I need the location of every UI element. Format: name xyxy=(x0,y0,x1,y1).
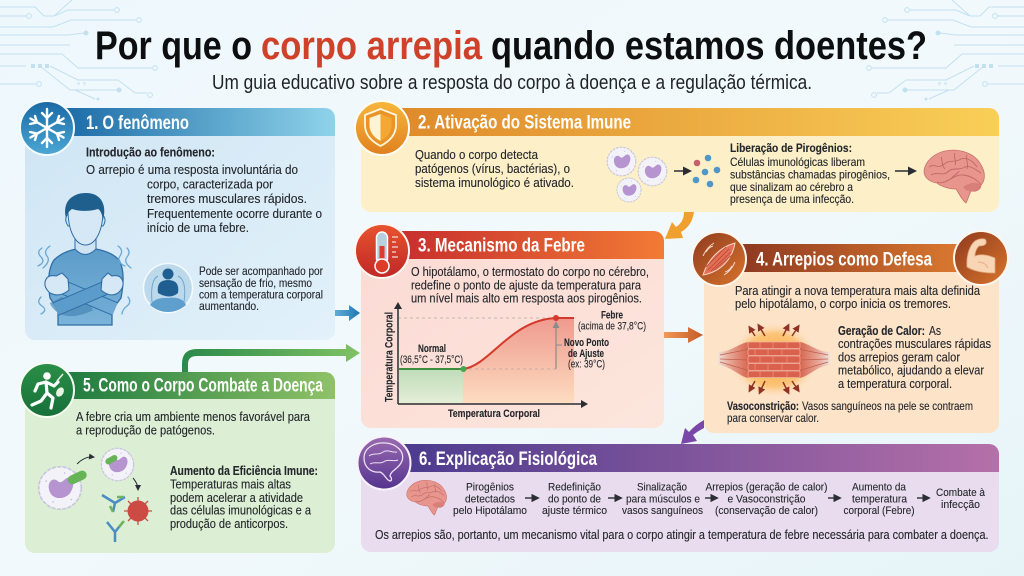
icon: person in bed xyxy=(144,264,192,312)
arrow: step 2 to 3 xyxy=(608,497,620,499)
text: hipotálamo: um nível mais alto em resposta aos pirogênios. xyxy=(411,290,642,306)
step: aumento da temperatura: corporal (Febre) xyxy=(844,505,915,517)
text: sensação de frio: aumentando. xyxy=(199,299,259,313)
text: aumento da eficiência imune: das células imunológicas e a xyxy=(170,502,312,518)
label: novo ponto de ajuste: (ex: 39°C) xyxy=(568,358,605,370)
text: hipotálamo: O hipotálamo, o termostato do corpo no cérebro, xyxy=(411,264,649,279)
header: 2 Ativação xyxy=(395,108,999,136)
panel: 2 Ativação do Sistema Imune xyxy=(355,101,999,212)
text: geração de calor: dos arrepios geram calor xyxy=(838,350,961,364)
subtitle: Um guia educativo sobre a resposta do corpo à doença e a regulação térmica. xyxy=(212,71,812,94)
step: combate à infecção xyxy=(936,487,986,511)
text: liberação de pirogênios: Células imunológicas liberam xyxy=(730,155,865,169)
icon: shield xyxy=(355,101,409,155)
text: introdução: tremores musculares rápidos. xyxy=(147,191,307,206)
text: geração de calor xyxy=(838,323,991,391)
text: aumento da eficiência imune xyxy=(170,463,318,531)
step: redefinição: ajuste térmico xyxy=(542,505,607,517)
text: introdução xyxy=(86,144,322,235)
step: pirogênios detectados: detectados xyxy=(465,494,515,506)
step: aumento da temperatura xyxy=(844,482,915,517)
step: redefinição: do ponto de xyxy=(548,494,601,506)
panel: 1 O fenômeno xyxy=(20,101,335,340)
text: liberação de pirogênios: Liberação de Pirogênios: xyxy=(730,141,852,155)
text: sensação de frio xyxy=(199,264,323,313)
step: aumento da temperatura: temperatura xyxy=(852,494,908,506)
step: sinalização: vasos sanguíneos xyxy=(622,505,703,517)
title: quando estamos doentes? xyxy=(491,24,927,68)
step: redefinição: Redefinição xyxy=(548,482,601,494)
text: vasoconstrição xyxy=(727,399,973,425)
text: geração de calor: a temperatura corporal. xyxy=(838,376,952,391)
text: hipotálamo: redefine o ponto de ajuste da temperatura para xyxy=(411,278,642,292)
label: normal: Normal xyxy=(418,343,446,355)
header: 2 Ativação: 2. Ativação do Sistema Imune xyxy=(418,112,631,134)
text: vasoconstrição: para conservar calor. xyxy=(727,411,819,425)
text: introdução: início de uma febre. xyxy=(147,220,249,235)
text: sensação de frio: sensação de frio, mesmo xyxy=(199,276,312,290)
text: aumento da eficiência imune: Aumento da Eficiência Imune: xyxy=(170,463,318,478)
text: liberação de pirogênios: presença de uma infecção. xyxy=(730,192,854,206)
header: 1 O fenômeno xyxy=(60,108,335,136)
icon: brain xyxy=(924,150,984,203)
icon: immune cells xyxy=(607,147,667,202)
icon: muscle xyxy=(692,232,746,286)
icon: contracting muscle with heat xyxy=(718,322,830,398)
header: 3 Mecanismo xyxy=(395,231,664,259)
text: sensação de frio: com a temperatura corporal xyxy=(199,288,323,302)
text: sensação de frio: Pode ser acompanhado por xyxy=(199,264,323,278)
text: detecta patógenos: sistema imunológico é ativado. xyxy=(415,175,574,190)
label: febre: Febre xyxy=(601,310,623,322)
arrow: orange from panel 2 to panel 3 xyxy=(665,212,694,239)
text: introdução: Introdução ao fenômeno: xyxy=(86,144,215,160)
text: geração de calor: metabólico, ajudando a elevar xyxy=(838,362,985,378)
label: novo ponto de ajuste: de Ajuste xyxy=(568,348,604,360)
axis label: x: Temperatura Corporal xyxy=(448,408,540,420)
panel: 6 Explicação Fisiológica xyxy=(358,436,999,552)
label: novo ponto de ajuste xyxy=(564,337,609,370)
arrow: cells to pyrogens xyxy=(674,170,689,172)
text: para atingir xyxy=(735,283,981,311)
step: combate à infecção: Combate à xyxy=(936,487,986,499)
icon: running figure xyxy=(20,363,74,417)
text: introdução: corpo, caracterizada por xyxy=(147,176,274,192)
axis label: y: Temperatura Corporal xyxy=(384,312,396,402)
step: arrepios e vasoconstrição xyxy=(706,482,828,517)
arrow: green elbow from panel 5 to panel 3 xyxy=(182,344,360,372)
arrow: blue to panel 3 xyxy=(335,305,360,321)
text: introdução: Frequentemente ocorre durante o xyxy=(147,206,322,221)
header: 6 Explicação: 6. Explicação Fisiológica xyxy=(419,449,597,470)
step: redefinição xyxy=(542,482,607,517)
text: detecta patógenos: patógenos (vírus, bactérias), o xyxy=(415,161,570,176)
text: aumento da eficiência imune: produção de anticorpos. xyxy=(170,516,288,531)
text: liberação de pirogênios xyxy=(730,141,890,206)
label: normal xyxy=(400,343,463,366)
text: a febre cria: A febre cria um ambiente menos favorável para xyxy=(76,409,311,424)
step: arrepios e vasoconstrição: (conservação de calor) xyxy=(715,505,818,517)
header: 4 Arrepios xyxy=(735,244,965,272)
text: para atingir: pelo hipotálamo, o corpo inicia os tremores. xyxy=(735,296,951,311)
step: sinalização: para músculos e xyxy=(626,494,700,506)
icon: pyrogen dots xyxy=(693,155,720,187)
icon: snowflake xyxy=(20,101,74,155)
text: para atingir: Para atingir a nova temperatura mais alta definida xyxy=(735,283,981,298)
text: aumento da eficiência imune: Temperaturas mais altas xyxy=(170,476,291,492)
step: sinalização: Sinalização xyxy=(637,482,687,494)
step: arrepios e vasoconstrição: e Vasoconstrição xyxy=(728,494,806,506)
text: detecta patógenos: Quando o corpo detecta xyxy=(415,147,539,162)
text: aumento da eficiência imune: podem acelerar a atividade xyxy=(170,490,303,505)
arrow: step 4 to 5 xyxy=(828,497,839,499)
text: vasoconstrição: Vasos sanguíneos na pele se contraem xyxy=(802,399,973,413)
header: 5 Como o Corpo xyxy=(60,372,335,399)
chart: temperature curve xyxy=(384,302,646,420)
arrows: heat radiating xyxy=(750,326,798,392)
arrow: pyrogens to brain xyxy=(895,170,914,172)
circuit decoration right xyxy=(867,0,1024,100)
title xyxy=(95,24,927,68)
header: 6 Explicação xyxy=(395,444,999,472)
step: arrepios e vasoconstrição: Arrepios (geração de calor) xyxy=(706,482,828,494)
label: febre xyxy=(578,310,646,332)
step: combate à infecção: infecção xyxy=(941,499,980,511)
text: geração de calor: contrações musculares rápidas xyxy=(838,336,991,351)
text: a febre cria: a reprodução de patógenos. xyxy=(76,422,215,438)
step: aumento da temperatura: Aumento da xyxy=(852,482,907,494)
icon: flexed arm xyxy=(954,231,1008,285)
icon: phagocytosis and antibodies xyxy=(39,448,152,542)
header: 4 Arrepios: 4. Arrepios como Defesa xyxy=(756,250,932,270)
panel: 5 Como o Corpo Combate a Doença xyxy=(20,363,335,553)
text: vasoconstrição: Vasoconstrição: xyxy=(727,399,799,413)
step: pirogênios detectados: Pirogênios xyxy=(466,482,514,494)
label: novo ponto de ajuste: Novo Ponto xyxy=(564,337,609,349)
text: hipotálamo xyxy=(411,264,649,306)
panel: 4 Arrepios como Defesa xyxy=(692,231,1008,433)
icon: brain small xyxy=(407,480,447,515)
header: 1 O fenômeno: 1. O fenômeno xyxy=(86,113,189,134)
header: 3 Mecanismo: 3. Mecanismo da Febre xyxy=(418,236,585,256)
title: corpo arrepia xyxy=(261,24,483,68)
arrow: step 5 to 6 xyxy=(917,497,928,499)
text: liberação de pirogênios: substâncias chamadas pirogênios, xyxy=(730,168,890,182)
text: introdução: O arrepio é uma resposta involuntária do xyxy=(86,162,298,177)
step: pirogênios detectados: pelo Hipotálamo xyxy=(453,505,527,517)
flow: physiological chain xyxy=(453,482,986,517)
circuit decoration left xyxy=(0,0,157,100)
panel: 3 Mecanismo da Febre xyxy=(355,224,664,428)
text: a febre cria xyxy=(76,409,311,438)
arrow: step 3 to 4 xyxy=(705,497,716,499)
icon: thermometer xyxy=(355,224,409,278)
arrow: step 1 to 2 xyxy=(525,497,537,499)
icon: brain outline xyxy=(358,436,410,490)
text: liberação de pirogênios: que sinalizam ao cérebro a xyxy=(730,180,853,194)
text: detecta patógenos xyxy=(415,147,574,190)
icon: person shivering xyxy=(38,193,131,325)
text: geração de calor: Geração de Calor: xyxy=(838,323,925,338)
step: sinalização xyxy=(622,482,703,517)
label: febre: (acima de 37,8°C) xyxy=(578,320,646,332)
text: geração de calor: As xyxy=(929,323,941,338)
label: normal: (36,5°C - 37,5°C) xyxy=(400,354,463,366)
header: 5 Como o Corpo: 5. Como o Corpo Combate a Doença xyxy=(83,376,323,396)
title: Por que o xyxy=(95,24,252,68)
step: pirogênios detectados xyxy=(453,482,527,517)
arrow: purple from panel 4 to panel 6 xyxy=(681,420,704,444)
arrow: orange-brown from panel 3 to panel 4 xyxy=(664,327,703,343)
